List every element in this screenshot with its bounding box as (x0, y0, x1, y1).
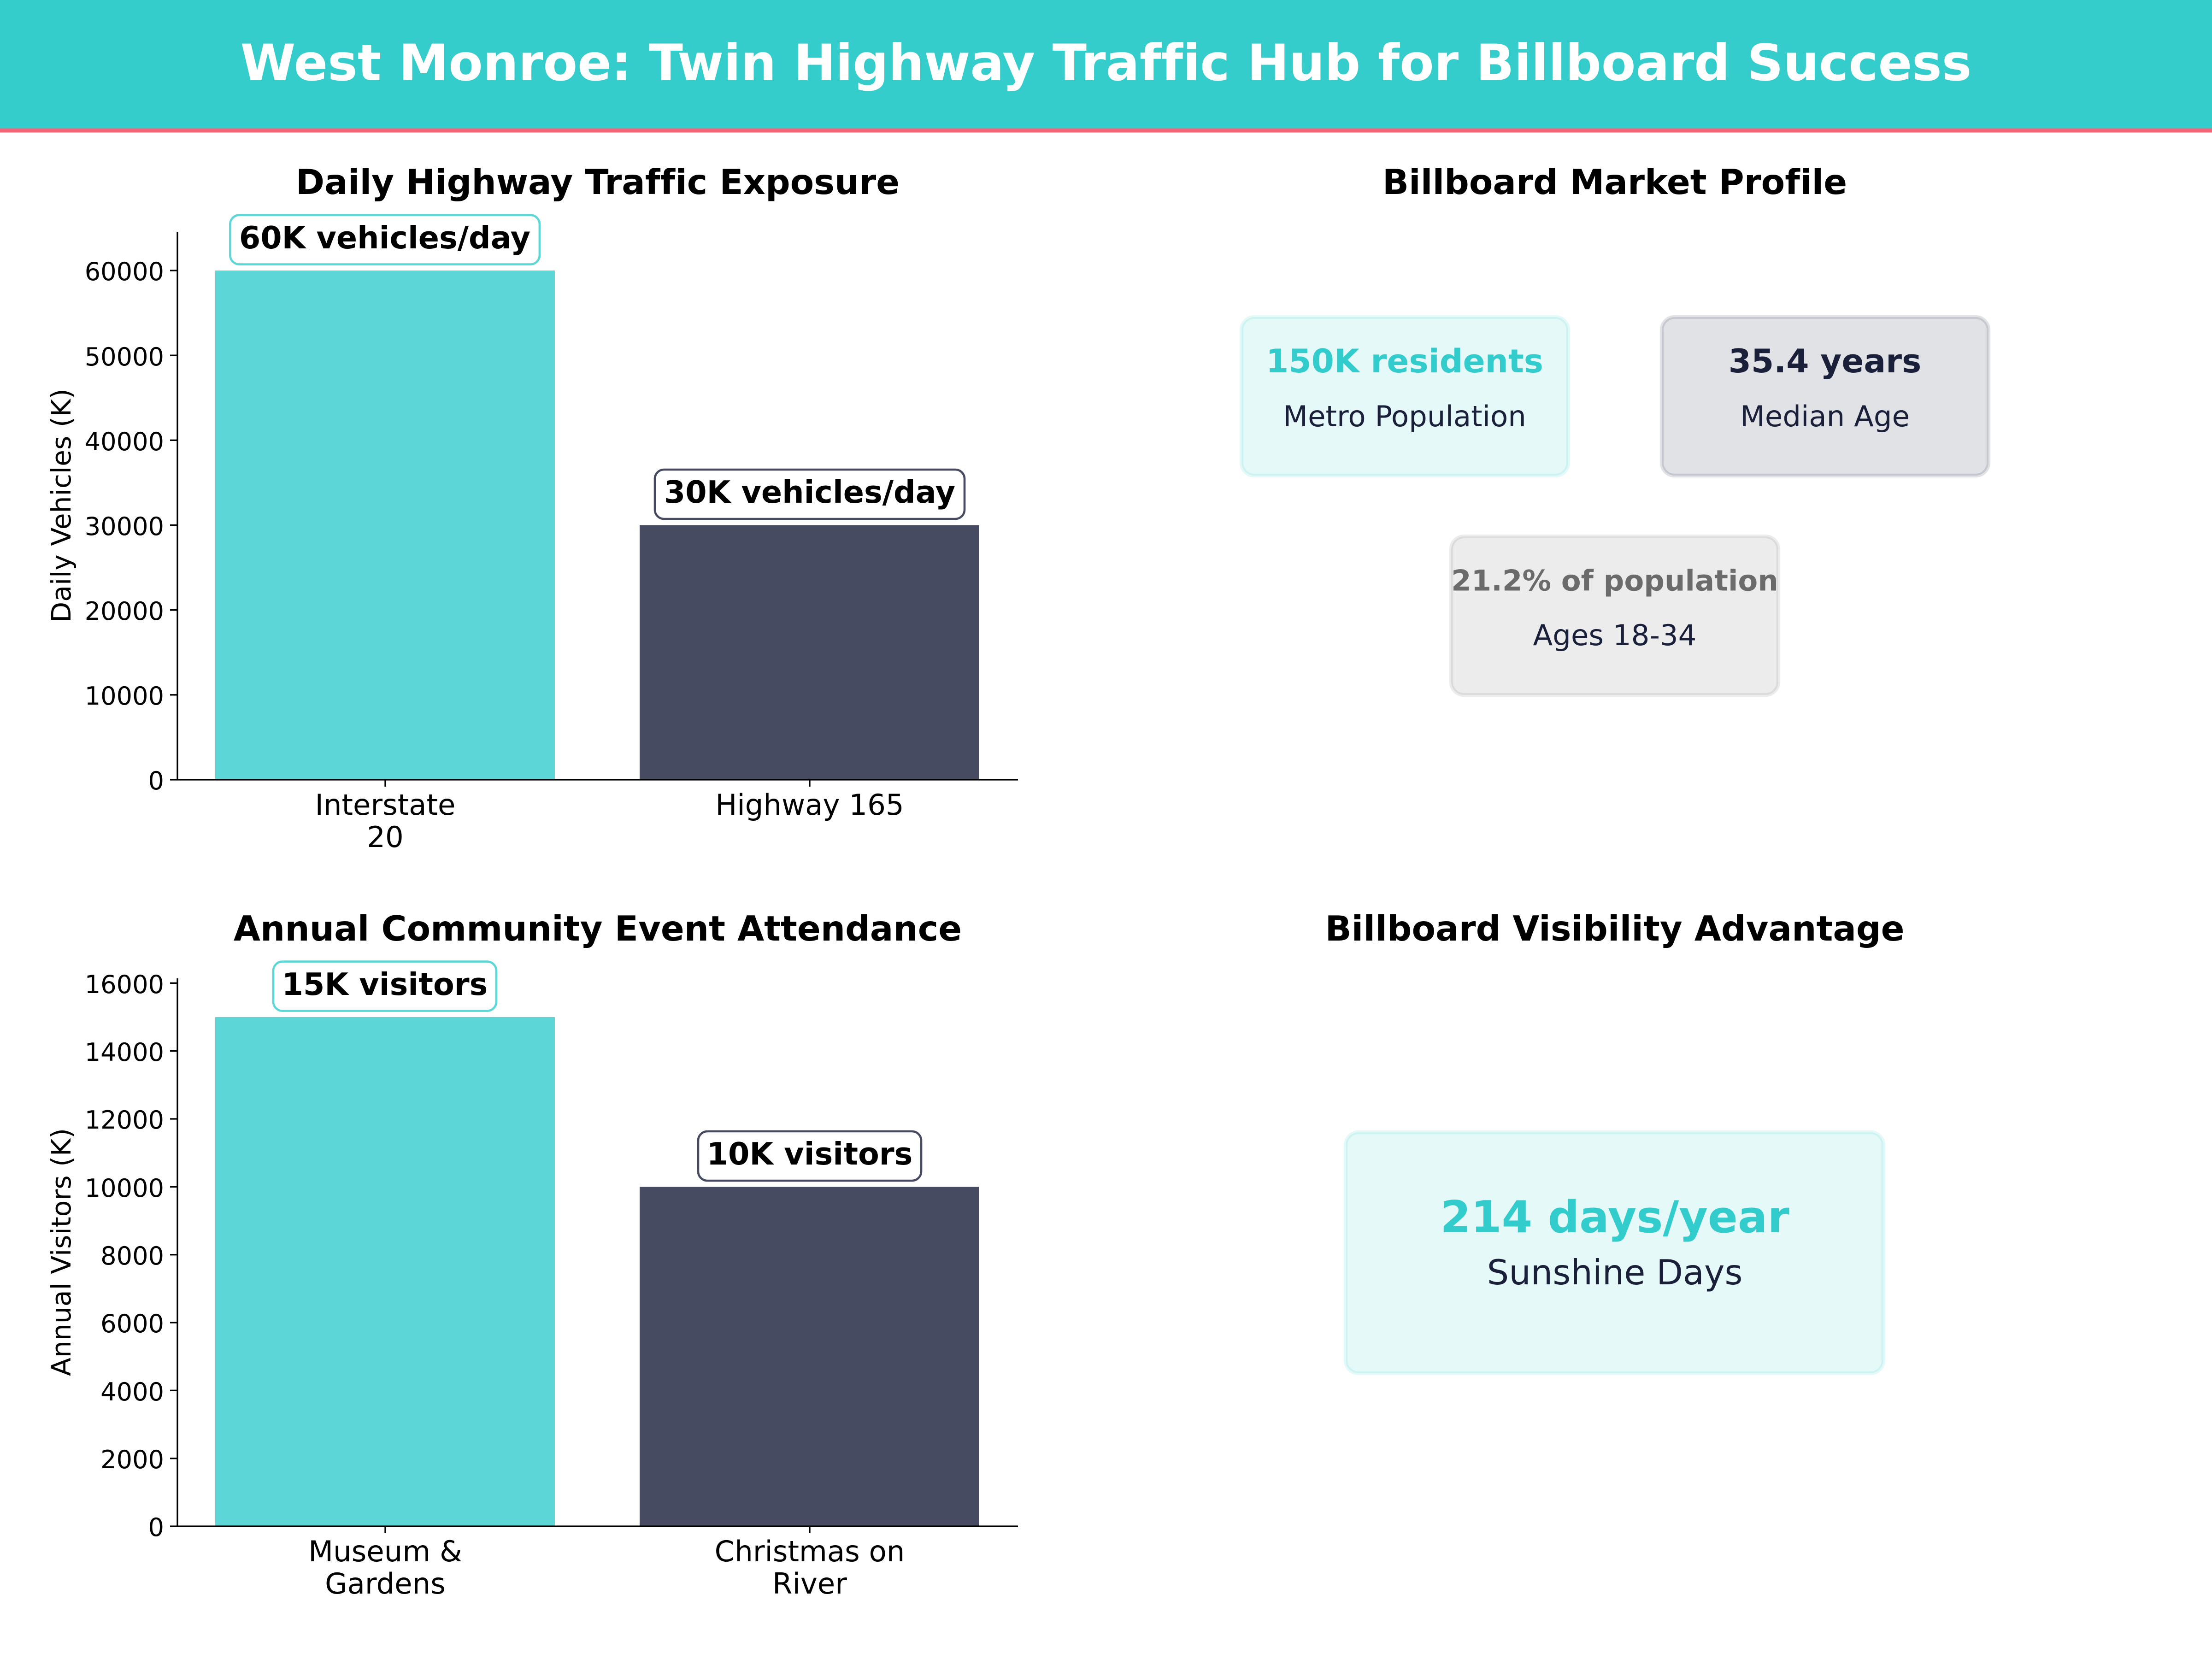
y axis tick labels: 16000 (85, 970, 164, 999)
card: sunshine days (1346, 1132, 1883, 1373)
y axis tick labels: 2000 (100, 1445, 164, 1474)
y axis tick labels: 12000 (85, 1106, 164, 1135)
x label: Museum and Gardens: Gardens (325, 1567, 446, 1600)
x label: Highway 165: Highway 165 (715, 788, 904, 822)
callout: 60K vehicles per day: 60K vehicles/day (239, 220, 530, 256)
y axis label: Daily Vehicles (K) (46, 388, 77, 623)
card: sunshine days: Sunshine Days (1487, 1252, 1742, 1293)
header banner (0, 0, 2212, 133)
y axis tick labels (85, 970, 164, 1542)
card: ages 18-34 (1451, 536, 1778, 695)
y axis tick labels (85, 257, 164, 795)
card: ages 18-34: 21.2% of population (1451, 564, 1778, 597)
y axis tick labels: 30000 (85, 512, 164, 541)
card: metro population: 150K residents (1266, 342, 1543, 380)
title: West Monroe: Twin Highway Traffic Hub for Billboard Success (241, 34, 1971, 92)
bar: Museum and Gardens (215, 1017, 555, 1526)
x label: Interstate 20: 20 (367, 820, 404, 854)
heading: billboard visibility advantage: Billboard Visibility Advantage (1325, 908, 1904, 949)
panel: billboard market profile (1241, 162, 1988, 695)
y axis tick labels: 8000 (100, 1241, 164, 1271)
y axis tick labels: 50000 (85, 342, 164, 371)
bar: Highway 165 (640, 525, 979, 780)
x label: Christmas on River: River (772, 1567, 847, 1600)
x label: Christmas on River: Christmas on (715, 1535, 905, 1568)
callout: 60K vehicles per day (230, 215, 540, 265)
card: sunshine days: 214 days/year (1440, 1191, 1789, 1243)
card: ages 18-34: Ages 18-34 (1533, 618, 1696, 652)
x label: Interstate 20: Interstate (315, 788, 456, 822)
panel: billboard visibility advantage (1325, 908, 1904, 1373)
card: median age (1662, 317, 1988, 476)
y axis tick labels: 20000 (85, 597, 164, 626)
heading: daily highway traffic exposure: Daily Highway Traffic Exposure (296, 162, 900, 202)
heading: billboard market profile: Billboard Market Profile (1382, 162, 1847, 202)
card: metro population (1241, 317, 1568, 476)
y axis tick labels: 4000 (100, 1377, 164, 1406)
callout: 10K visitors (698, 1131, 921, 1181)
callout: 15K visitors (273, 962, 496, 1011)
y axis tick labels: 10000 (85, 682, 164, 711)
card: metro population: Metro Population (1283, 400, 1526, 433)
panel: daily highway traffic chart (46, 162, 1018, 854)
panel: annual community event attendance chart (46, 908, 1018, 1600)
card: median age: Median Age (1740, 400, 1910, 433)
bar: Interstate 20 (215, 271, 555, 780)
callout: 30K vehicles per day: 30K vehicles/day (664, 474, 955, 510)
y axis tick labels: 6000 (100, 1309, 164, 1338)
heading: annual community event attendance: Annual Community Event Attendance (234, 908, 962, 949)
x label: Museum and Gardens: Museum & (308, 1535, 462, 1568)
axes and ticks (170, 232, 1018, 787)
y axis tick labels: 40000 (85, 427, 164, 456)
y axis label: Annual Visitors (K) (46, 1128, 77, 1376)
callout: 30K vehicles per day (655, 470, 965, 519)
callout: 10K visitors: 10K visitors (707, 1136, 912, 1172)
y axis tick labels: 0 (148, 1513, 164, 1542)
callout: 15K visitors: 15K visitors (282, 966, 488, 1002)
y axis tick labels: 0 (148, 766, 164, 795)
y axis tick labels: 14000 (85, 1038, 164, 1067)
card: median age: 35.4 years (1729, 342, 1921, 380)
bar: Christmas on River (640, 1187, 979, 1526)
axes and ticks (170, 978, 1018, 1533)
y axis tick labels: 60000 (85, 257, 164, 286)
y axis tick labels: 10000 (85, 1174, 164, 1203)
